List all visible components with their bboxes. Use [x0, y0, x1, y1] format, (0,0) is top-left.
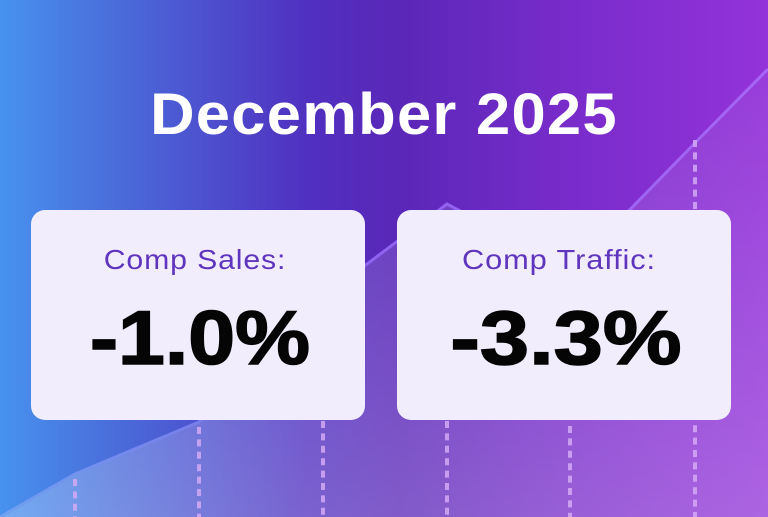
- dashed gridlines: [75, 140, 695, 517]
- title: December 2025: [150, 82, 618, 147]
- comp sales label: Comp Sales:: [103, 244, 286, 275]
- panel: comp sales: [31, 210, 365, 420]
- comp traffic value: -3.3%: [450, 296, 682, 381]
- panel: comp traffic: [397, 210, 731, 420]
- comp traffic label: Comp Traffic:: [461, 244, 656, 275]
- comp sales value: -1.0%: [90, 296, 310, 381]
